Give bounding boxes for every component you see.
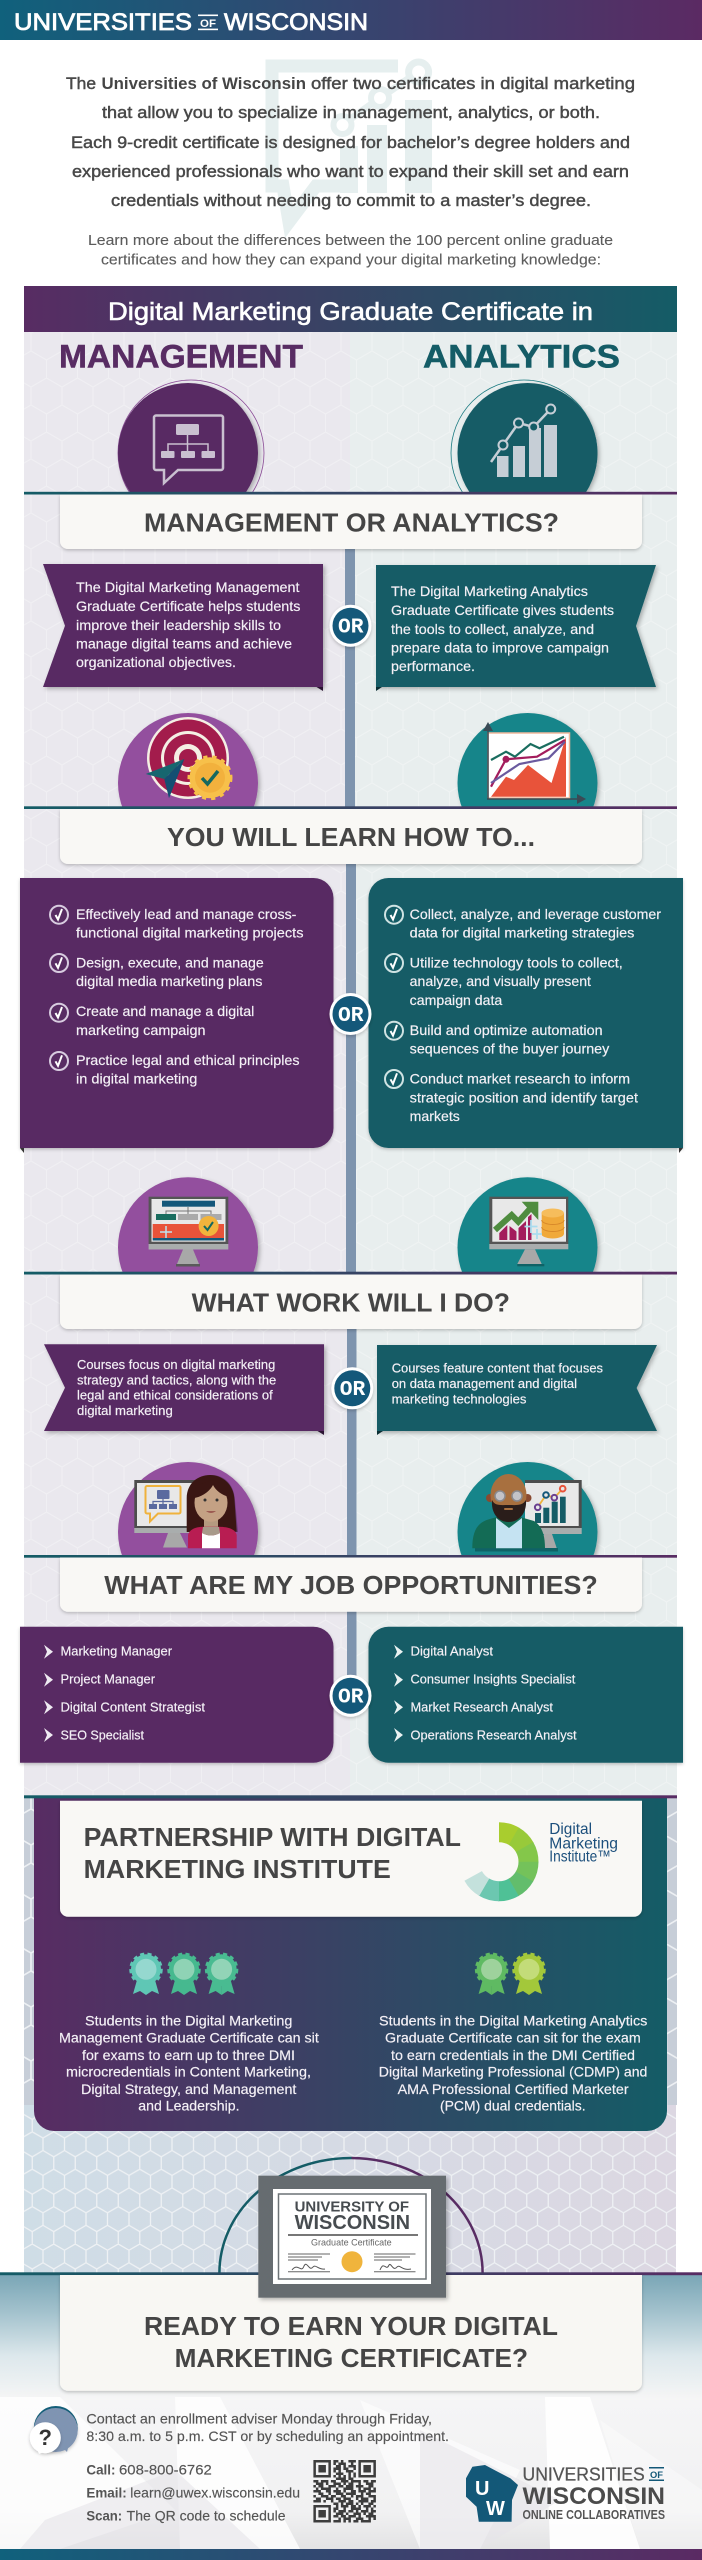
panel: management skills: functional digital marketing projects [76,925,304,941]
intro paragraph: Each 9-credit certificate is designed for bachelor’s degree holders and [71,134,630,152]
panel: management jobs: SEO Specialist [60,1727,144,1742]
Digital Marketing Institute logo [459,1821,618,1902]
logo: UW online collaboratives [466,2465,665,2522]
logo: UW online collaboratives: WISCONSIN [522,2483,665,2510]
partnership heading card [60,1801,642,1917]
icon: two award badges [477,1954,544,1995]
intro paragraph [66,75,635,210]
panel: management skills: in digital marketing [76,1071,197,1087]
section heading: what work [60,1274,642,1329]
panel: analytics jobs: Market Research Analyst [410,1699,553,1714]
ribbon: analytics work: marketing technologies [392,1391,527,1406]
panel: management skills: Design, execute, and manage [76,955,264,971]
title banner: Digital Marketing Graduate Certificate in [108,298,593,326]
text: analytics credentials: Digital Marketing Professional (CDMP) and [379,2064,647,2080]
ribbon: management work: legal and ethical considerations of [77,1388,273,1403]
ribbon: management work: Courses focus on digital marketing [77,1357,275,1372]
intro paragraph: that allow you to specialize in management, analytics, or both. [102,104,600,122]
icon: line and area chart [458,713,598,853]
ribbon: analytics description: Graduate Certificate gives students [391,602,614,618]
panel: management skills: Practice legal and ethical principles [76,1052,300,1068]
panel: analytics jobs: Operations Research Analyst [410,1727,577,1742]
OR badge 2: OR [338,1005,364,1028]
intro paragraph: The [66,75,96,93]
intro sub-text [88,232,613,268]
panel: management skills: Create and manage a digital [76,1003,254,1019]
panel: analytics skills: Build and optimize automation [410,1022,603,1038]
header bar: UNIVERSITIES [14,9,192,36]
text: analytics credentials [379,2013,647,2114]
OR badge 1 [330,605,372,647]
partnership heading card: MARKETING INSTITUTE [84,1856,391,1884]
ribbon: analytics description: performance. [391,658,475,674]
OR badge 2 [330,993,372,1035]
section heading: job opportunities [60,1558,642,1612]
divider line 5 [24,1795,677,1798]
section heading: management or analytics: MANAGEMENT OR ANALYTICS? [144,510,559,538]
ribbon: analytics description: the tools to collect, analyze, and [391,621,594,637]
contact text: 8:30 a.m. to 5 p.m. CST or by scheduling an appointment. [86,2428,449,2444]
intro sub-text: Learn more about the differences between the 100 percent online graduate [88,232,613,249]
text: analytics credentials: Students in the Digital Marketing Analytics [379,2013,647,2029]
ribbon: analytics description: prepare data to improve campaign [391,640,609,656]
text: analytics credentials: AMA Professional Certified Marketer [398,2081,629,2097]
divider line 3 [24,1272,677,1274]
intro paragraph: Universities of Wisconsin [102,75,306,93]
text: analytics credentials: to earn credentials in the DMI Certified [391,2047,635,2063]
contact details [86,2461,300,2523]
contact details: Email: [86,2484,127,2500]
framed certificate [258,2176,446,2298]
ribbon: management description [43,564,323,691]
panel: management skills [20,878,334,1153]
text: management credentials [59,2013,319,2114]
heading: management: MANAGEMENT [59,338,303,374]
panel: analytics skills: strategic position and identify target [410,1089,638,1105]
framed certificate: Graduate Certificate [311,2238,392,2249]
contact details: 608-800-6762 [119,2461,212,2477]
partnership heading card: PARTNERSHIP WITH DIGITAL [84,1824,461,1852]
panel: management jobs: Marketing Manager [60,1644,173,1659]
icon: man at monitor [458,1462,598,1602]
QR code [313,2461,376,2521]
partnership panel [34,1796,667,2131]
icon: question speech bubbles: ? [38,2425,52,2450]
panel: analytics skills: Conduct market research to inform [410,1071,630,1087]
footer bar [0,2549,702,2560]
panel: management jobs [20,1627,334,1763]
checklist icons [385,906,403,1088]
intro paragraph: credentials without needing to commit to a master’s degree. [111,192,591,210]
OR badge 3: OR [340,1379,366,1402]
OR badge 3 [331,1367,373,1409]
panel: management skills: digital media marketing plans [76,973,262,989]
hexagon background: partnership and certificate [24,1798,677,2273]
call to action card: READY TO EARN YOUR DIGITAL [144,2313,558,2341]
chevron bullets [44,1645,53,1742]
ribbon: analytics description [376,565,656,691]
ribbon: management description: improve their leadership skills to [76,617,281,633]
contact details: Call: [86,2461,116,2477]
section heading: you will learn [60,809,642,864]
text: management credentials: Management Graduate Certificate can sit [59,2030,319,2046]
panel: analytics jobs: Digital Analyst [410,1644,493,1659]
ribbon: management work [44,1344,324,1435]
checklist icons [50,906,68,1070]
header bar: WISCONSIN [224,9,368,36]
OR badge 4 [330,1675,372,1717]
intro sub-text: certificates and how they can expand your digital marketing knowledge: [101,252,601,268]
panel: analytics skills [368,878,683,1153]
text: analytics credentials: (PCM) dual credentials. [440,2098,586,2114]
logo: UW online collaboratives: U [475,2478,489,2500]
icon: management org chart bubble [118,380,264,526]
arc behind certificate [219,2158,483,2273]
section heading: what work: WHAT WORK WILL I DO? [192,1290,510,1318]
watermark icon [272,62,432,222]
panel: analytics skills: analyze, and visually present [410,973,591,989]
call to action card: MARKETING CERTIFICATE? [175,2345,528,2373]
panel: analytics skills: markets [410,1108,460,1124]
panel: analytics skills: Collect, analyze, and leverage customer [410,906,661,922]
chevron bullets [394,1645,403,1742]
Digital Marketing Institute logo: Digital [549,1821,592,1838]
panel: management jobs: Digital Content Strategist [60,1699,205,1714]
OR badge 4: OR [338,1686,364,1710]
icon: analytics chart [451,380,598,526]
framed certificate: WISCONSIN [295,2212,410,2234]
panel: analytics skills: sequences of the buyer journey [410,1041,609,1057]
call to action card [60,2275,642,2391]
panel: analytics skills: campaign data [410,992,503,1008]
Digital Marketing Institute logo: Marketing [549,1836,618,1853]
text: analytics credentials: Graduate Certificate can sit for the exam [385,2030,641,2046]
divider line 6 [0,2272,702,2275]
panel: analytics jobs: Consumer Insights Specialist [410,1672,576,1687]
OR badge 1: OR [338,616,364,640]
ribbon: management work: strategy and tactics, along with the [77,1372,276,1387]
divider line 2 [24,806,677,809]
ribbon: analytics work: Courses feature content that focuses [392,1361,603,1376]
framed certificate: UNIVERSITY OF [295,2200,409,2216]
intro paragraph: offer two certificates in digital marketing [311,75,635,93]
ribbon: management description: organizational objectives. [76,654,236,670]
panel: analytics jobs [368,1627,683,1763]
text: management credentials: Digital Strategy, and Management [81,2081,297,2097]
panel: management jobs: Project Manager [60,1672,156,1687]
icon: question speech bubbles [30,2406,78,2454]
icon: target with badge [118,713,258,853]
text: management credentials: microcredentials in Content Marketing, [66,2064,311,2080]
contact text: Contact an enrollment adviser Monday through Friday, [86,2410,432,2426]
comparison panel background [24,332,677,1796]
section heading: management or analytics [60,494,642,549]
ribbon: management description: The Digital Marketing Management [76,579,300,595]
icon: woman at monitor [118,1462,258,1602]
ribbon: management description: manage digital teams and achieve [76,636,292,652]
ribbon: analytics work: on data management and digital [392,1376,577,1391]
text: management credentials: Students in the Digital Marketing [85,2013,292,2029]
ribbon: analytics description: The Digital Marketing Analytics [391,583,588,599]
icon: monitor with growth chart [458,1177,598,1317]
title banner [24,286,677,332]
icon: three award badges [131,1954,237,1995]
contact details: The QR code to schedule [127,2507,286,2523]
footer gradient background [0,2275,702,2549]
ribbon: management description: Graduate Certificate helps students [76,598,300,614]
divider line 4 [24,1555,677,1558]
logo: UW online collaboratives: W [486,2498,505,2520]
section heading: job opportunities: WHAT ARE MY JOB OPPORTUNITIES? [104,1572,598,1600]
panel: management skills: Effectively lead and manage cross- [76,906,297,922]
panel: management skills: marketing campaign [76,1022,206,1038]
header bar: OF [200,18,216,30]
divider line 1 [24,492,677,494]
contact details: Scan: [86,2507,122,2523]
header bar [0,0,702,40]
icon: monitor with org chart [118,1177,258,1317]
logo: UW online collaboratives: UNIVERSITIES [522,2465,645,2485]
intro paragraph: experienced professionals who want to expand their skill set and earn [72,163,629,181]
Digital Marketing Institute logo: Institute™ [549,1849,611,1866]
logo: UW online collaboratives: ONLINE COLLABORATIVES [522,2508,665,2522]
ribbon: management work: digital marketing [77,1403,173,1418]
heading: analytics: ANALYTICS [423,338,620,374]
text: management credentials: for exams to earn up to three DMI [82,2047,295,2063]
logo: UW online collaboratives: OF [650,2470,664,2480]
ribbon: analytics work [377,1345,657,1435]
contact details: learn@uwex.wisconsin.edu [130,2484,300,2500]
section heading: you will learn: YOU WILL LEARN HOW TO... [167,824,535,852]
panel: analytics skills: data for digital marketing strategies [410,925,634,941]
panel: analytics skills: Utilize technology tools to collect, [410,955,623,971]
text: management credentials: and Leadership. [138,2098,240,2114]
contact text [86,2410,449,2444]
